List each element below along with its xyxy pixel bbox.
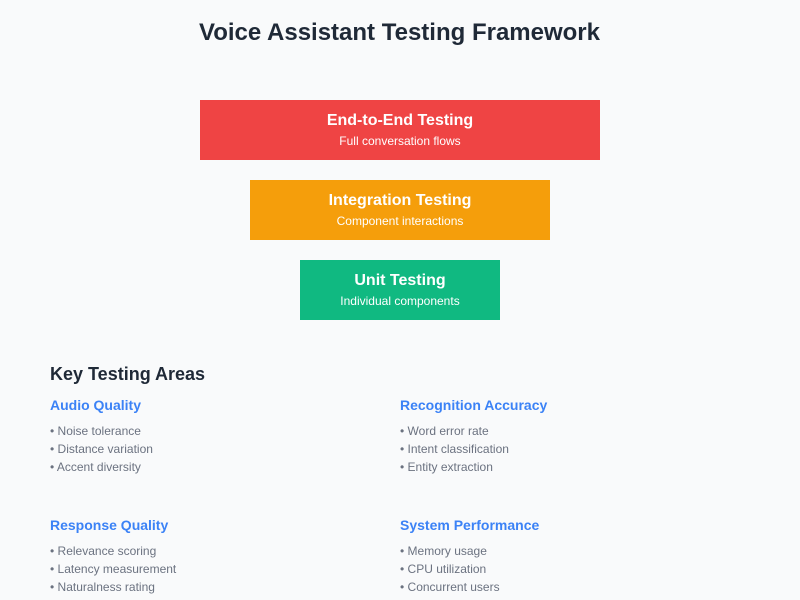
heading: system performance: System Performance (400, 517, 539, 533)
heading: audio quality: Audio Quality (50, 397, 141, 413)
heading: unit testing: Unit Testing (354, 272, 446, 289)
panel: recognition accuracy (400, 397, 548, 474)
panel: audio quality (50, 397, 153, 474)
list item: • Latency measurement (50, 562, 176, 576)
list item: • CPU utilization (400, 562, 486, 576)
title: Voice Assistant Testing Framework (199, 19, 600, 46)
panel: response quality (50, 517, 176, 594)
panel: unit testing (300, 260, 500, 320)
list item: • Concurrent users (400, 580, 500, 594)
heading: recognition accuracy: Recognition Accuracy (400, 397, 547, 413)
heading: response quality: Response Quality (50, 517, 168, 533)
heading: end-to-end testing: End-to-End Testing (327, 112, 473, 129)
list item: • Distance variation (50, 442, 153, 456)
list item: • Memory usage (400, 544, 487, 558)
list item: • Intent classification (400, 442, 509, 456)
heading: key testing areas: Key Testing Areas (50, 364, 205, 384)
list item: • Entity extraction (400, 460, 493, 474)
list item: • Word error rate (400, 424, 489, 438)
panel: integration testing (250, 180, 550, 240)
heading: integration testing: Integration Testing (329, 192, 471, 209)
text: component interactions: Component interactions (337, 214, 463, 228)
panel: end-to-end testing (200, 100, 600, 160)
text: full conversation flows: Full conversation flows (339, 134, 461, 148)
list item: • Accent diversity (50, 460, 141, 474)
list item: • Noise tolerance (50, 424, 141, 438)
panel: system performance (400, 517, 539, 594)
text: individual components: Individual components (340, 294, 460, 308)
list item: • Naturalness rating (50, 580, 155, 594)
list item: • Relevance scoring (50, 544, 156, 558)
